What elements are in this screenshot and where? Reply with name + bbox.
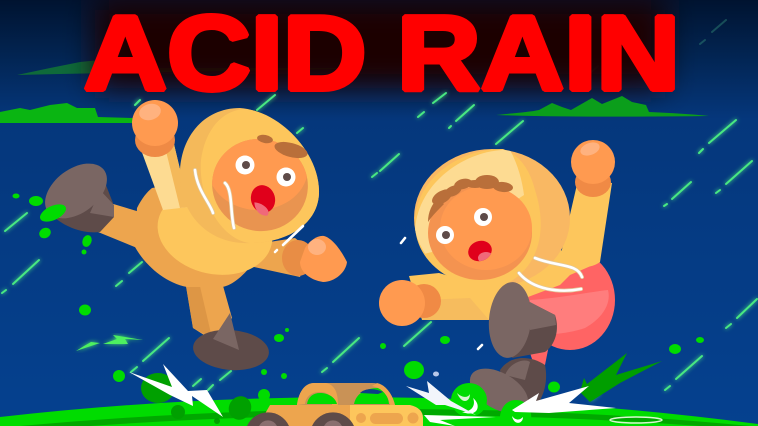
mouth	[468, 240, 492, 262]
lower boot	[462, 358, 546, 423]
right arm	[245, 238, 310, 277]
eyes	[436, 208, 492, 244]
raised fist	[132, 100, 178, 157]
cloud: right green	[496, 96, 709, 117]
cloud: left green	[0, 103, 133, 123]
left boot	[35, 152, 117, 232]
face	[212, 134, 308, 232]
blue white droplet	[433, 372, 439, 376]
character: right falling person	[379, 140, 615, 423]
toy car	[247, 383, 423, 426]
hair	[256, 134, 309, 161]
raised arm	[140, 140, 189, 210]
cloud: faded top left	[17, 60, 395, 75]
dark green splashes	[141, 373, 256, 424]
hood	[414, 149, 570, 287]
acid splash with swirl, centre	[451, 383, 487, 417]
raised arm	[560, 180, 612, 267]
ground shock streak	[424, 415, 496, 426]
acid splash with swirl, right	[500, 400, 531, 426]
title	[84, 0, 680, 112]
title glow	[95, 0, 665, 88]
upper boot	[486, 280, 557, 360]
lightning: dark green	[580, 353, 662, 402]
character: left falling person	[35, 100, 347, 373]
ground	[0, 397, 758, 426]
shorts	[525, 250, 615, 370]
lightning: white left	[129, 364, 223, 417]
rain streaks	[2, 93, 757, 400]
acid droplets	[12, 194, 704, 401]
torso	[450, 250, 600, 320]
left arm	[409, 273, 489, 320]
lightning: white centre	[406, 381, 476, 415]
face	[428, 175, 532, 280]
ground ripple	[610, 417, 662, 423]
hair	[428, 175, 513, 222]
lower boot	[191, 313, 271, 373]
faint distant rain	[460, 20, 726, 75]
chest	[150, 179, 280, 285]
mouth	[250, 185, 276, 216]
acid on boot	[37, 201, 69, 225]
motion lines	[401, 238, 582, 349]
lightning: glowing green	[76, 335, 143, 351]
left fist	[379, 280, 441, 326]
body	[135, 180, 262, 287]
right fist	[282, 236, 347, 282]
left leg	[98, 203, 142, 250]
eyes	[236, 156, 296, 186]
raised fist	[571, 140, 615, 197]
lightning: white right	[512, 386, 616, 413]
lower leg	[185, 275, 232, 342]
hood	[180, 108, 319, 243]
motion lines	[195, 170, 303, 252]
